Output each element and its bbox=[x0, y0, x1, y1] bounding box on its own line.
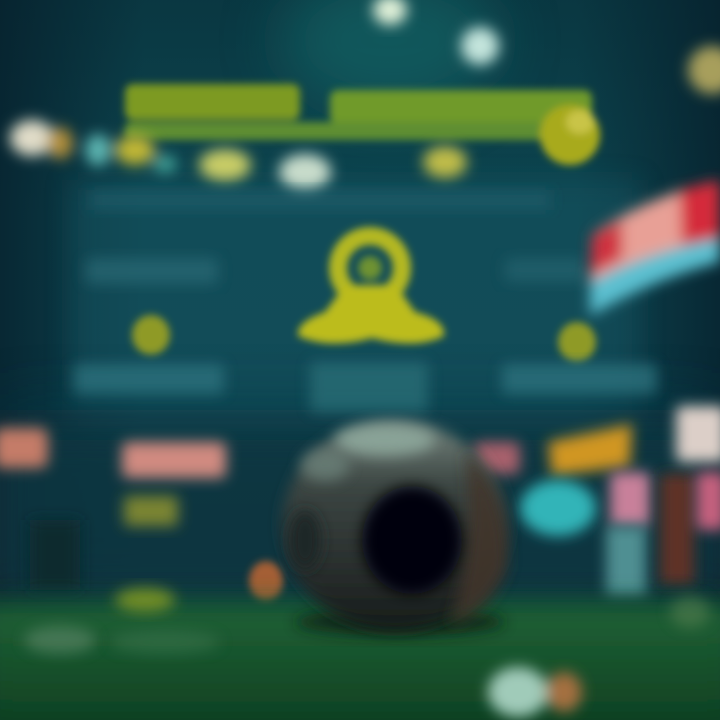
text block: upper right bbox=[505, 258, 585, 282]
text block: lower right bbox=[502, 364, 657, 394]
foreground small ball bbox=[488, 667, 582, 717]
banner: cyan bbox=[520, 480, 596, 536]
dark ball opening bbox=[362, 486, 462, 594]
banner: yellow small bbox=[124, 496, 178, 526]
panel: left column bbox=[74, 258, 224, 394]
banner: red pillar bbox=[660, 474, 694, 584]
heading bbox=[125, 84, 600, 165]
text block: upper left bbox=[86, 258, 218, 284]
text block: lower left bbox=[74, 364, 224, 394]
text block: centre bbox=[310, 362, 428, 412]
banner: dark post bbox=[30, 520, 80, 590]
banner: pink right bbox=[610, 472, 650, 526]
bunting lights row bbox=[10, 120, 467, 190]
banner: pink centre bbox=[474, 442, 520, 474]
banner: teal pillar bbox=[606, 526, 646, 596]
grass bbox=[0, 588, 720, 720]
banner: far left bbox=[0, 428, 48, 468]
football bbox=[282, 421, 508, 636]
panel: right column bbox=[502, 258, 657, 394]
subtitle text bar bbox=[90, 190, 550, 210]
icon: yellow ribbon badge bbox=[298, 236, 444, 344]
icon: right badge bbox=[558, 322, 596, 362]
banner: orange bbox=[548, 424, 632, 476]
flag bbox=[590, 180, 720, 316]
banner: white and pink right edge bbox=[676, 406, 720, 462]
icon: left badge bbox=[132, 315, 170, 355]
small orange ball bbox=[249, 561, 283, 601]
stadium lights bbox=[373, 0, 720, 94]
banner: pink left bbox=[122, 442, 226, 478]
crowd banners row bbox=[0, 406, 720, 601]
panel: centre column bbox=[298, 236, 444, 412]
